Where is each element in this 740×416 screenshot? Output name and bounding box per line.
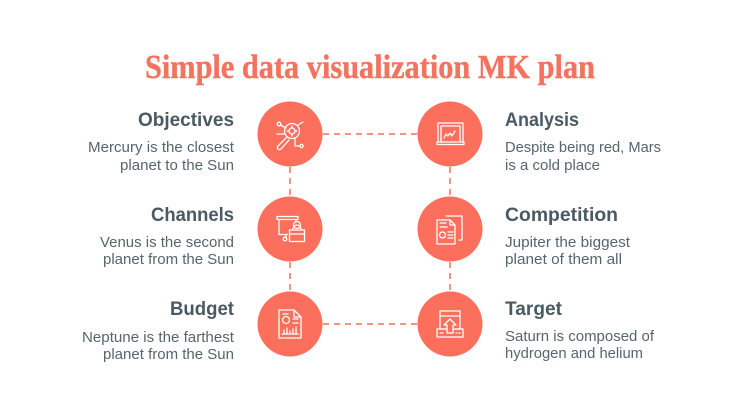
text: competition description: planet of them all — [505, 251, 622, 268]
text: objectives description: planet to the Sun — [120, 157, 234, 174]
text: budget description — [82, 329, 235, 363]
text: competition description — [505, 234, 631, 268]
text: target description: Saturn is composed of — [505, 328, 655, 345]
heading: budget: Budget — [170, 299, 235, 320]
icon: target upload window — [418, 292, 482, 356]
text: channels description — [100, 234, 234, 268]
text: budget description: Neptune is the farthest — [82, 329, 235, 346]
text: analysis description: is a cold place — [505, 157, 600, 174]
heading: objectives: Objectives — [138, 110, 234, 131]
title: Simple data visualization MK plan — [145, 49, 595, 86]
heading: competition: Competition — [505, 205, 618, 226]
panel: budget — [82, 299, 235, 363]
heading: analysis: Analysis — [505, 110, 579, 131]
text: objectives description — [88, 139, 235, 174]
text: target description — [505, 328, 655, 362]
text: target description: hydrogen and helium — [505, 345, 643, 362]
icon: analysis laptop chart — [418, 102, 482, 166]
text: objectives description: Mercury is the closest — [88, 139, 235, 156]
text: channels description: planet from the Sun — [103, 251, 234, 268]
icon: competition documents — [418, 196, 482, 262]
panel: competition — [505, 205, 631, 268]
text: channels description: Venus is the second — [100, 234, 234, 251]
panel: channels — [100, 205, 234, 268]
panel: analysis — [505, 110, 661, 174]
text: budget description: planet from the Sun — [103, 346, 234, 363]
icon: channels presentation board — [258, 196, 322, 262]
icon: budget report document — [258, 292, 322, 356]
dashed connectors — [290, 134, 450, 324]
heading: target: Target — [505, 299, 563, 320]
heading: channels: Channels — [151, 205, 234, 226]
panel: target — [505, 299, 655, 362]
text: analysis description — [505, 139, 661, 174]
text: analysis description: Despite being red, Mars — [505, 139, 661, 156]
panel: objectives — [88, 110, 235, 174]
text: competition description: Jupiter the biggest — [505, 234, 631, 251]
icon: objectives magnifier network — [258, 102, 322, 166]
